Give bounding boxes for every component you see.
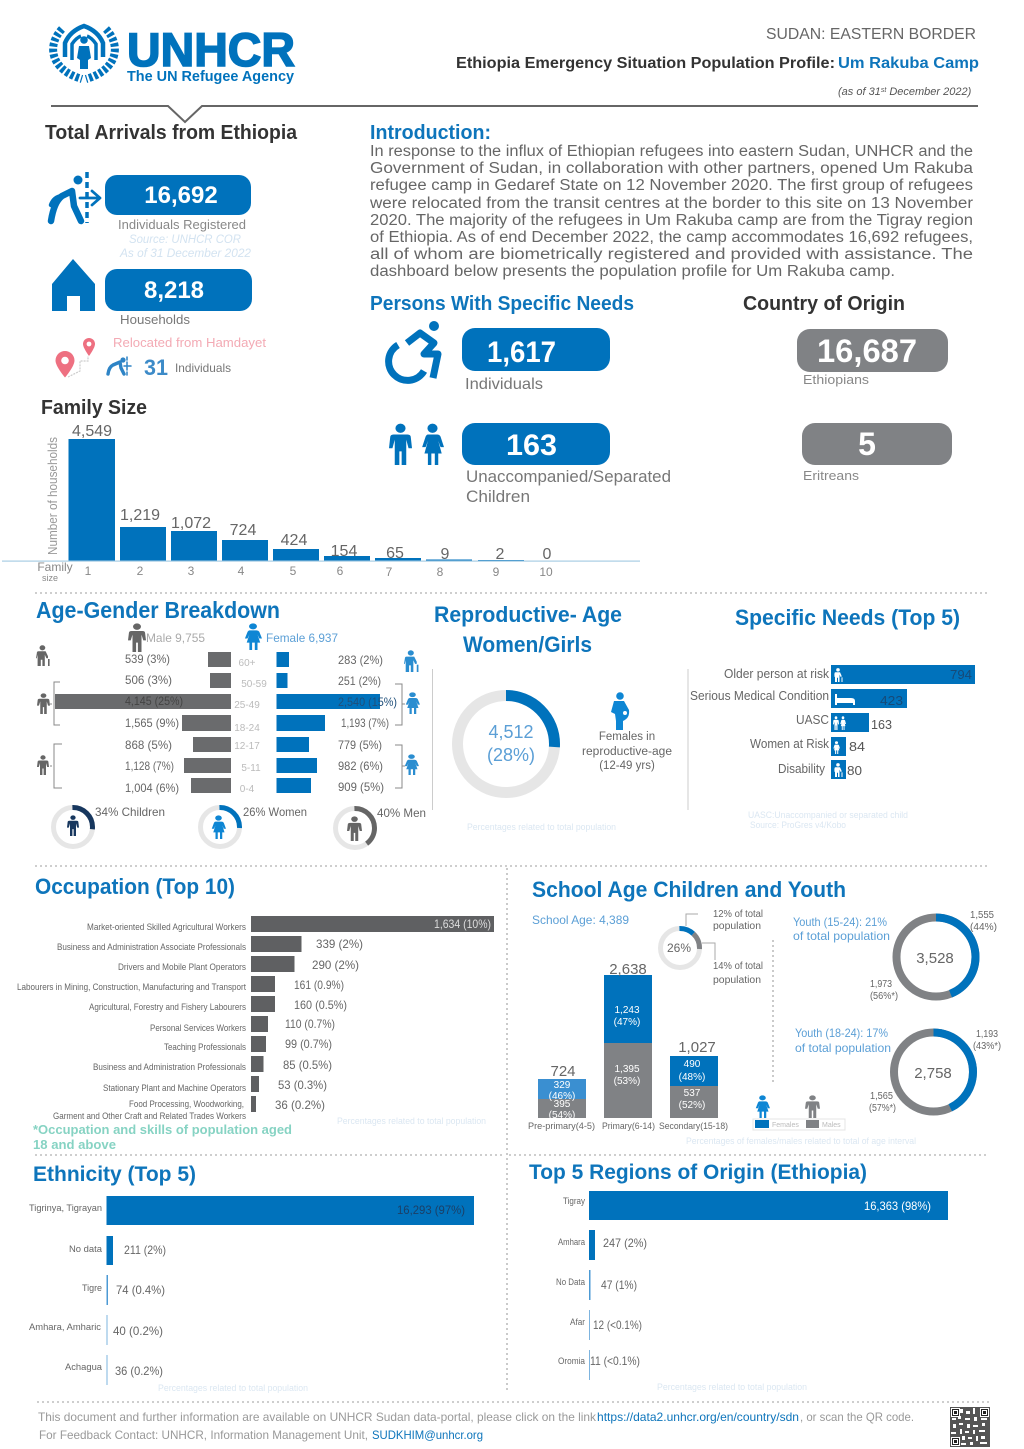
- bar values: 1,072: [171, 515, 211, 532]
- stat: households: 8,218: [144, 277, 204, 304]
- bar values: 724: [230, 522, 256, 539]
- category labels: Amhara: [558, 1237, 585, 1247]
- donut: school age share: 26%: [667, 941, 691, 955]
- values: [847, 667, 972, 778]
- stacked bar: primary: 2,638: [609, 961, 647, 978]
- stacked bar: primary: Primary(6-14): [602, 1121, 655, 1132]
- donut: youth 18-24: 2,758: [914, 1065, 952, 1082]
- stacked bar: secondary: 1,027: [678, 1039, 716, 1056]
- values: 163: [871, 717, 892, 732]
- donut: youth 15-24: (44%): [970, 922, 997, 933]
- wordmark: UNHCR: [127, 23, 295, 76]
- bar values: 154: [331, 543, 357, 560]
- axis labels: 1: [85, 564, 92, 578]
- donut: youth 15-24: [793, 910, 997, 1002]
- stat: relocated individuals: Individuals: [175, 361, 231, 375]
- values: 53 (0.3%): [278, 1078, 327, 1092]
- document header: [456, 26, 979, 98]
- note: Percentages of females/males related to total of age interval: [686, 1136, 916, 1146]
- note: Percentages related to total population: [657, 1382, 807, 1392]
- icon: pregnant woman: [611, 692, 629, 730]
- male values: 1,004 (6%): [125, 781, 179, 795]
- axis labels: 5: [290, 564, 297, 578]
- values: 110 (0.7%): [285, 1017, 335, 1031]
- stat: Ethiopians: 16,687: [817, 333, 917, 369]
- stat: households: [105, 269, 252, 327]
- paragraph: Government of Sudan, in collaboration with other partners, opened Um Rakuba: [370, 160, 973, 177]
- values: 247 (2%): [603, 1236, 647, 1250]
- bar icons: [833, 668, 855, 777]
- female values: 2,540 (15%): [338, 695, 397, 709]
- values: 423: [880, 693, 903, 708]
- male values: 1,565 (9%): [125, 716, 179, 730]
- female values: 909 (5%): [338, 780, 384, 794]
- donut: youth 18-24: (43%*): [973, 1041, 1001, 1052]
- paragraph: 2020. The majority of the refugees in Um Rakuba camp are from the Tigray region: [370, 212, 973, 229]
- note: Percentages related to total population: [467, 822, 616, 832]
- male values: 539 (3%): [125, 652, 170, 666]
- values: 339 (2%): [316, 937, 363, 951]
- axis labels: 2: [137, 564, 144, 578]
- values: 40 (0.2%): [113, 1324, 163, 1338]
- male values: [125, 652, 183, 795]
- paragraph: In response to the influx of Ethiopian refugees into eastern Sudan, UNHCR and the: [370, 143, 973, 160]
- donut: children: 34% Children: [95, 805, 165, 819]
- stacked bar: pre-primary: [528, 1063, 595, 1132]
- paragraph: of Ethiopia. As of end December 2022, the camp accommodates 16,692 refugees,: [370, 229, 973, 246]
- stat: households: Households: [120, 312, 191, 327]
- stat: relocated individuals: [144, 355, 231, 380]
- panel: school age children and youth: [528, 877, 1001, 1146]
- donut chart: (28%): [487, 745, 535, 765]
- stat: unaccompanied children: [462, 423, 671, 506]
- data portal line: , or scan the QR code.: [800, 1410, 914, 1424]
- feedback line: SUDKHIM@unhcr.org: [372, 1428, 483, 1442]
- values: 12 (<0.1%): [593, 1318, 642, 1332]
- category labels: Market-oriented Skilled Agricultural Workers: [87, 922, 246, 933]
- heading: Introduction:: [370, 122, 491, 144]
- stacked bar: secondary: 490: [684, 1059, 701, 1070]
- panel: specific needs top 5: [690, 605, 975, 830]
- bars: [251, 916, 494, 1112]
- category labels: Serious Medical Condition: [690, 689, 829, 703]
- category labels: Older person at risk: [724, 667, 830, 681]
- male values: 868 (5%): [125, 738, 172, 752]
- values: 84: [849, 739, 865, 754]
- category labels: Amhara, Amharic: [29, 1322, 102, 1332]
- values: [113, 1203, 465, 1378]
- icon: route pins: [56, 338, 95, 378]
- stat: individuals: 1,617: [487, 336, 556, 369]
- stat: Eritreans: 5: [858, 426, 876, 462]
- icon: accessibility: [389, 321, 439, 380]
- notes: Source: ProGres v4/Kobo: [750, 820, 846, 830]
- donut: men: 40% Men: [377, 806, 426, 820]
- stat: individuals registered: Source: UNHCR COR: [129, 234, 241, 246]
- icon: laurel wreath and sheltering hands: [53, 26, 115, 79]
- stacked bar: pre-primary: 395: [554, 1099, 571, 1110]
- category labels: Agricultural, Forestry and Fishery Labourers: [89, 1002, 246, 1013]
- age labels: [234, 658, 267, 795]
- axis labels: size: [42, 573, 58, 583]
- values: 74 (0.4%): [116, 1283, 165, 1297]
- caption: [582, 731, 672, 772]
- stacked bar: secondary: (52%): [679, 1100, 705, 1111]
- notes: [748, 810, 908, 830]
- stacked bar: pre-primary: 329: [554, 1080, 571, 1091]
- donut: school age share: population: [713, 921, 761, 932]
- values: 794: [950, 667, 972, 682]
- panel: persons with specific needs: [370, 293, 671, 506]
- date: December 2022): [886, 86, 972, 98]
- stat: individuals: Individuals: [465, 376, 543, 393]
- stacked bar: secondary: Secondary(15-18): [659, 1121, 728, 1132]
- male bars: [55, 652, 231, 793]
- axis labels: [37, 560, 553, 583]
- data portal line: [38, 1410, 914, 1424]
- caption: reproductive-age: [582, 746, 672, 758]
- female values: 1,193 (7%): [341, 716, 389, 730]
- legend: female: [245, 623, 338, 650]
- stat: Ethiopians: Ethiopians: [803, 372, 870, 387]
- stacked bar: pre-primary: Pre-primary(4-5): [528, 1121, 595, 1132]
- category labels: Achagua: [65, 1362, 102, 1372]
- icons: male age groups: [36, 645, 50, 775]
- male values: 1,128 (7%): [125, 759, 174, 773]
- donut: school age share: [660, 909, 763, 986]
- data portal line: This document and further information are available on UNHCR Sudan data-portal, please click on the link: [38, 1410, 597, 1424]
- values: 85 (0.5%): [283, 1058, 332, 1072]
- school age total: School Age: 4,389: [532, 913, 629, 927]
- stacked bar: primary: 1,243: [614, 1005, 640, 1016]
- paragraph: [369, 143, 973, 280]
- female values: 779 (5%): [338, 738, 382, 752]
- paragraph: all of whom are biometrically registered and provided with assistance. The: [370, 246, 973, 263]
- panel: ethnicity: [29, 1163, 474, 1393]
- axis labels: 4: [238, 564, 245, 578]
- caption: Females in: [599, 731, 655, 743]
- axis labels: Family: [37, 560, 73, 574]
- heading: Ethnicity (Top 5): [33, 1163, 196, 1186]
- panel: occupation: [17, 874, 494, 1152]
- donut chart: [458, 696, 554, 792]
- icons: female age groups: [404, 650, 420, 775]
- category labels: Tigrinya, Tigrayan: [29, 1203, 102, 1213]
- donut: youth 15-24: 1,555: [970, 910, 994, 921]
- age labels: 0-4: [240, 784, 255, 795]
- donut: women: [200, 805, 307, 846]
- male values: 4,145 (25%): [125, 694, 183, 708]
- tagline: The UN Refugee Agency: [127, 69, 294, 85]
- axis labels: 7: [386, 565, 393, 579]
- category labels: Oromia: [558, 1356, 585, 1366]
- icon: person crossing border: [51, 172, 100, 223]
- values: 290 (2%): [312, 958, 359, 972]
- note: Percentages related to total population: [337, 1116, 486, 1126]
- donut: men: [336, 806, 426, 848]
- date: (as of 31: [838, 86, 881, 98]
- heading: Family Size: [41, 397, 147, 419]
- values: 161 (0.9%): [294, 978, 344, 992]
- bar values: 424: [281, 532, 307, 549]
- heading: Persons With Specific Needs: [370, 293, 634, 315]
- female values: 982 (6%): [338, 759, 383, 773]
- values: 36 (0.2%): [275, 1098, 325, 1112]
- female values: 283 (2%): [338, 653, 383, 667]
- data portal line: https://data2.unhcr.org/en/country/sdn: [597, 1410, 799, 1424]
- category labels: Labourers in Mining, Construction, Manufacturing and Transport: [17, 982, 246, 993]
- values: 211 (2%): [124, 1243, 166, 1257]
- values: 160 (0.5%): [294, 998, 347, 1012]
- bars: [589, 1191, 948, 1380]
- female bars: [276, 652, 380, 793]
- donut: youth 15-24: 3,528: [916, 950, 954, 967]
- note: Percentages related to total population: [158, 1383, 308, 1393]
- icon: house: [52, 259, 95, 311]
- donut: school age share: 14% of total: [713, 961, 763, 972]
- panel: total arrivals: [45, 122, 298, 380]
- category labels: No Data: [556, 1277, 585, 1287]
- donut chart: 4,512: [488, 722, 534, 742]
- paragraph: dashboard below presents the population profile for Um Rakuba camp.: [370, 263, 895, 280]
- axis labels: 9: [493, 565, 500, 579]
- category labels: Business and Administration Associate Professionals: [57, 942, 246, 953]
- legend: male: Male 9,755: [146, 631, 205, 645]
- age labels: 50-59: [241, 679, 267, 690]
- panel: age-gender breakdown: [36, 597, 426, 848]
- heading: Total Arrivals from Ethiopia: [45, 122, 298, 144]
- category labels: Stationary Plant and Machine Operators: [103, 1083, 246, 1094]
- age labels: 5-11: [241, 763, 261, 774]
- stat: Ethiopians: [797, 329, 948, 387]
- legend: male: [128, 623, 205, 652]
- category labels: [556, 1196, 585, 1366]
- panel: country of origin: [743, 293, 952, 483]
- stat: unaccompanied children: Children: [466, 487, 530, 506]
- legend: Males: [822, 1122, 841, 1129]
- QR code: [950, 1407, 990, 1447]
- category labels: Garment and Other Craft and Related Trades Workers: [53, 1111, 246, 1122]
- heading: Occupation (Top 10): [35, 874, 235, 899]
- bars: [106, 1196, 474, 1385]
- stacked bar: primary: (53%): [614, 1076, 640, 1087]
- stacked bar: primary: (47%): [614, 1017, 640, 1028]
- heading: Country of Origin: [743, 293, 905, 315]
- values: [590, 1199, 931, 1368]
- female values: [338, 653, 397, 794]
- values: 11 (<0.1%): [590, 1354, 640, 1368]
- legend: female: Female 6,937: [266, 631, 338, 645]
- footer: [38, 1407, 990, 1447]
- relocated note: Relocated from Hamdayet: [113, 335, 266, 350]
- stat: Eritreans: [802, 423, 952, 483]
- heading: Age-Gender Breakdown: [36, 597, 280, 623]
- donut: women: 26% Women: [243, 805, 307, 819]
- category labels: Food Processing, Woodworking,: [129, 1099, 244, 1110]
- category labels: Disability: [778, 762, 826, 776]
- heading: Specific Needs (Top 5): [735, 605, 960, 630]
- bar values: 2: [496, 546, 505, 563]
- stacked bar: primary: [602, 961, 655, 1132]
- category labels: Tigray: [563, 1196, 585, 1206]
- legend: [753, 1095, 845, 1130]
- category labels: Drivers and Mobile Plant Operators: [118, 962, 246, 973]
- age labels: 25-49: [234, 700, 260, 711]
- age labels: 18-24: [234, 723, 260, 734]
- feedback line: For Feedback Contact: UNHCR, Information Management Unit,: [39, 1428, 368, 1442]
- location: SUDAN: EASTERN BORDER: [766, 26, 976, 43]
- paragraph: were relocated from the transit centres at the border to this site on 13 November: [369, 195, 973, 212]
- age labels: 60+: [239, 658, 256, 669]
- donut: youth 18-24: of total population: [795, 1041, 891, 1055]
- note: age scope: *Occupation and skills of population aged: [33, 1122, 292, 1137]
- logo: UNHCR: [53, 23, 295, 85]
- values: 1,634 (10%): [434, 917, 491, 931]
- stat: relocated individuals: 31: [144, 355, 168, 380]
- date: st: [881, 87, 887, 94]
- notes: UASC:Unaccompanied or separated child: [748, 810, 908, 820]
- values: 80: [847, 763, 862, 778]
- bar values: 1,219: [120, 507, 160, 524]
- heading: Women/Girls: [463, 632, 592, 657]
- category labels: [690, 667, 830, 776]
- stat: individuals registered: Individuals Registered: [118, 217, 246, 232]
- donut: youth 18-24: 1,193: [976, 1029, 998, 1040]
- category labels: UASC: [796, 713, 829, 727]
- panel: regions of origin: [529, 1161, 948, 1392]
- bars: [831, 665, 975, 779]
- axis labels: 10: [539, 565, 553, 579]
- heading: Top 5 Regions of Origin (Ethiopia): [529, 1161, 867, 1184]
- heading: School Age Children and Youth: [532, 877, 846, 902]
- donut: youth 18-24: [795, 1026, 1001, 1114]
- values: 47 (1%): [601, 1278, 637, 1292]
- note: age scope: 18 and above: [33, 1137, 116, 1152]
- paragraph: refugee camp in Gedaref State on 12 November 2020. The first group of refugees: [370, 177, 973, 194]
- category labels: Tigre: [82, 1283, 102, 1293]
- panel: introduction: [369, 122, 973, 280]
- axis labels: 8: [437, 565, 444, 579]
- axis labels: 3: [188, 564, 195, 578]
- main title: Ethiopia Emergency Situation Population Profile:: [456, 55, 835, 72]
- donut: children: [54, 805, 165, 846]
- brackets: [50, 682, 405, 788]
- category labels: [17, 922, 246, 1122]
- note: age scope: [33, 1122, 292, 1152]
- stat: unaccompanied children: Unaccompanied/Separated: [466, 467, 671, 486]
- stacked bar: pre-primary: (46%): [549, 1091, 575, 1102]
- stacked bar: secondary: 537: [684, 1088, 701, 1099]
- donut: youth 15-24: Youth (15-24): 21%: [793, 915, 887, 929]
- bar values: 65: [386, 545, 404, 562]
- stacked bar: pre-primary: 724: [550, 1063, 576, 1080]
- stat: individuals: [462, 328, 610, 393]
- category labels: Personal Services Workers: [150, 1023, 246, 1034]
- icon: small person crossing: [108, 357, 131, 375]
- bar chart: [2, 439, 640, 562]
- female values: 251 (2%): [338, 674, 381, 688]
- axis title: Number of households: [46, 437, 60, 555]
- stat: individuals registered: As of 31 December 2022: [119, 248, 252, 260]
- stacked bar: secondary: (48%): [679, 1072, 705, 1083]
- category labels: Teaching Professionals: [164, 1042, 246, 1053]
- icon: children: [389, 424, 444, 465]
- donut: youth 18-24: 1,565: [870, 1091, 893, 1102]
- stat: unaccompanied children: 163: [506, 429, 557, 462]
- heading: [434, 602, 622, 657]
- values: 16,293 (97%): [397, 1203, 465, 1217]
- bar values: [72, 423, 552, 563]
- legend: Females: [772, 1122, 799, 1129]
- male values: 506 (3%): [125, 673, 172, 687]
- stacked bar: primary: 1,395: [614, 1064, 640, 1075]
- values: 16,363 (98%): [864, 1199, 931, 1213]
- stat: Eritreans: Eritreans: [803, 468, 860, 483]
- stat: individuals registered: [105, 175, 252, 260]
- values: 99 (0.7%): [285, 1037, 332, 1051]
- values: [275, 917, 491, 1112]
- bar values: 9: [441, 546, 450, 563]
- donut: youth 18-24: (57%*): [869, 1103, 896, 1114]
- donut: youth 15-24: of total population: [793, 929, 890, 943]
- axis labels: 6: [337, 564, 344, 578]
- panel: family size: [2, 397, 640, 583]
- bar values: 0: [543, 546, 552, 563]
- donut: school age share: population: [713, 975, 761, 986]
- bar values: 4,549: [72, 423, 112, 440]
- category labels: [29, 1203, 102, 1372]
- donut: youth 15-24: 1,973: [870, 979, 892, 990]
- values: 36 (0.2%): [115, 1364, 163, 1378]
- category labels: Afar: [570, 1317, 585, 1327]
- donut: youth 18-24: Youth (18-24): 17%: [795, 1026, 888, 1040]
- stat: individuals registered: 16,692: [144, 182, 218, 209]
- caption: (12-49 yrs): [599, 760, 655, 772]
- age labels: 12-17: [234, 741, 260, 752]
- stacked bar: pre-primary: (54%): [549, 1110, 575, 1121]
- stacked bar: secondary: [659, 1039, 728, 1132]
- panel: reproductive-age women: [434, 602, 672, 832]
- heading: Reproductive- Age: [434, 602, 622, 627]
- camp name: Um Rakuba Camp: [838, 55, 979, 72]
- donut: youth 15-24: (56%*): [870, 991, 898, 1002]
- donut: school age share: 12% of total: [713, 909, 763, 920]
- category labels: No data: [69, 1244, 102, 1254]
- category labels: Business and Administration Professionals: [93, 1062, 246, 1073]
- category labels: Women at Risk: [750, 737, 830, 751]
